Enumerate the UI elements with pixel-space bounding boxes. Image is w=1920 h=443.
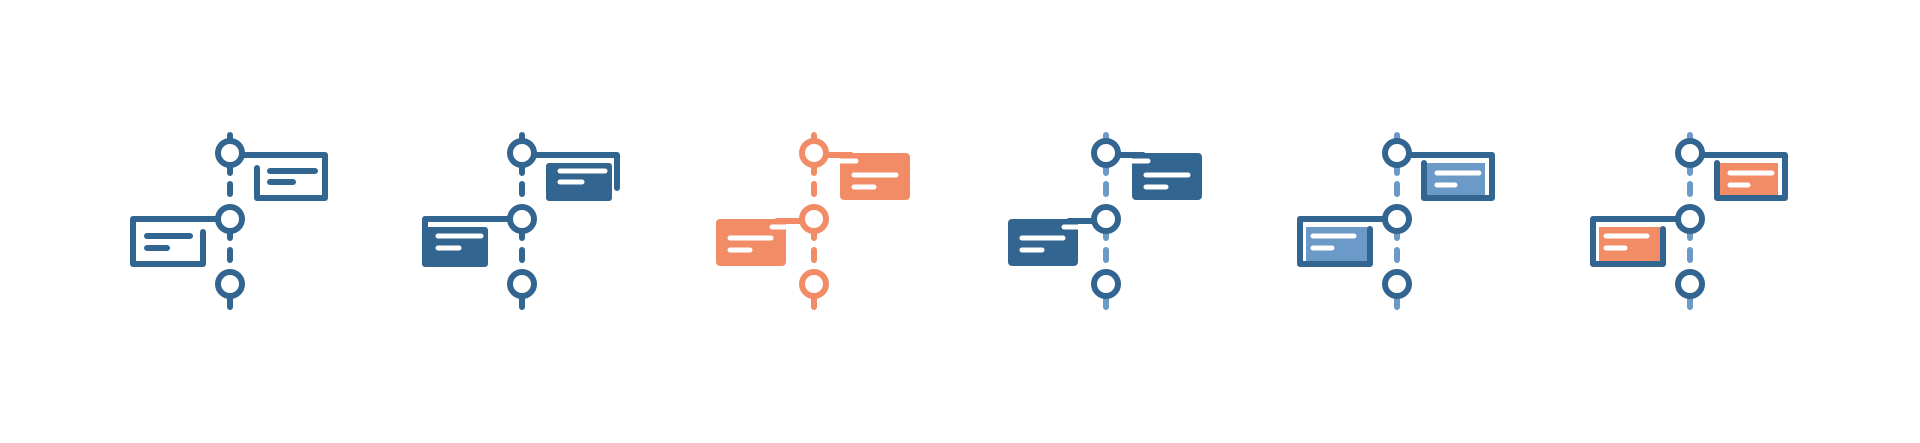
icon 5: light blue two-tone timeline [1300,135,1492,307]
icon 6: orange two-tone timeline [1593,135,1785,307]
icon 1: outline timeline [133,135,325,307]
icon 2: dark blue glyph timeline [422,135,617,307]
icon 3: orange filled timeline [716,135,910,307]
icon 4: dark blue filled timeline [1008,135,1202,307]
